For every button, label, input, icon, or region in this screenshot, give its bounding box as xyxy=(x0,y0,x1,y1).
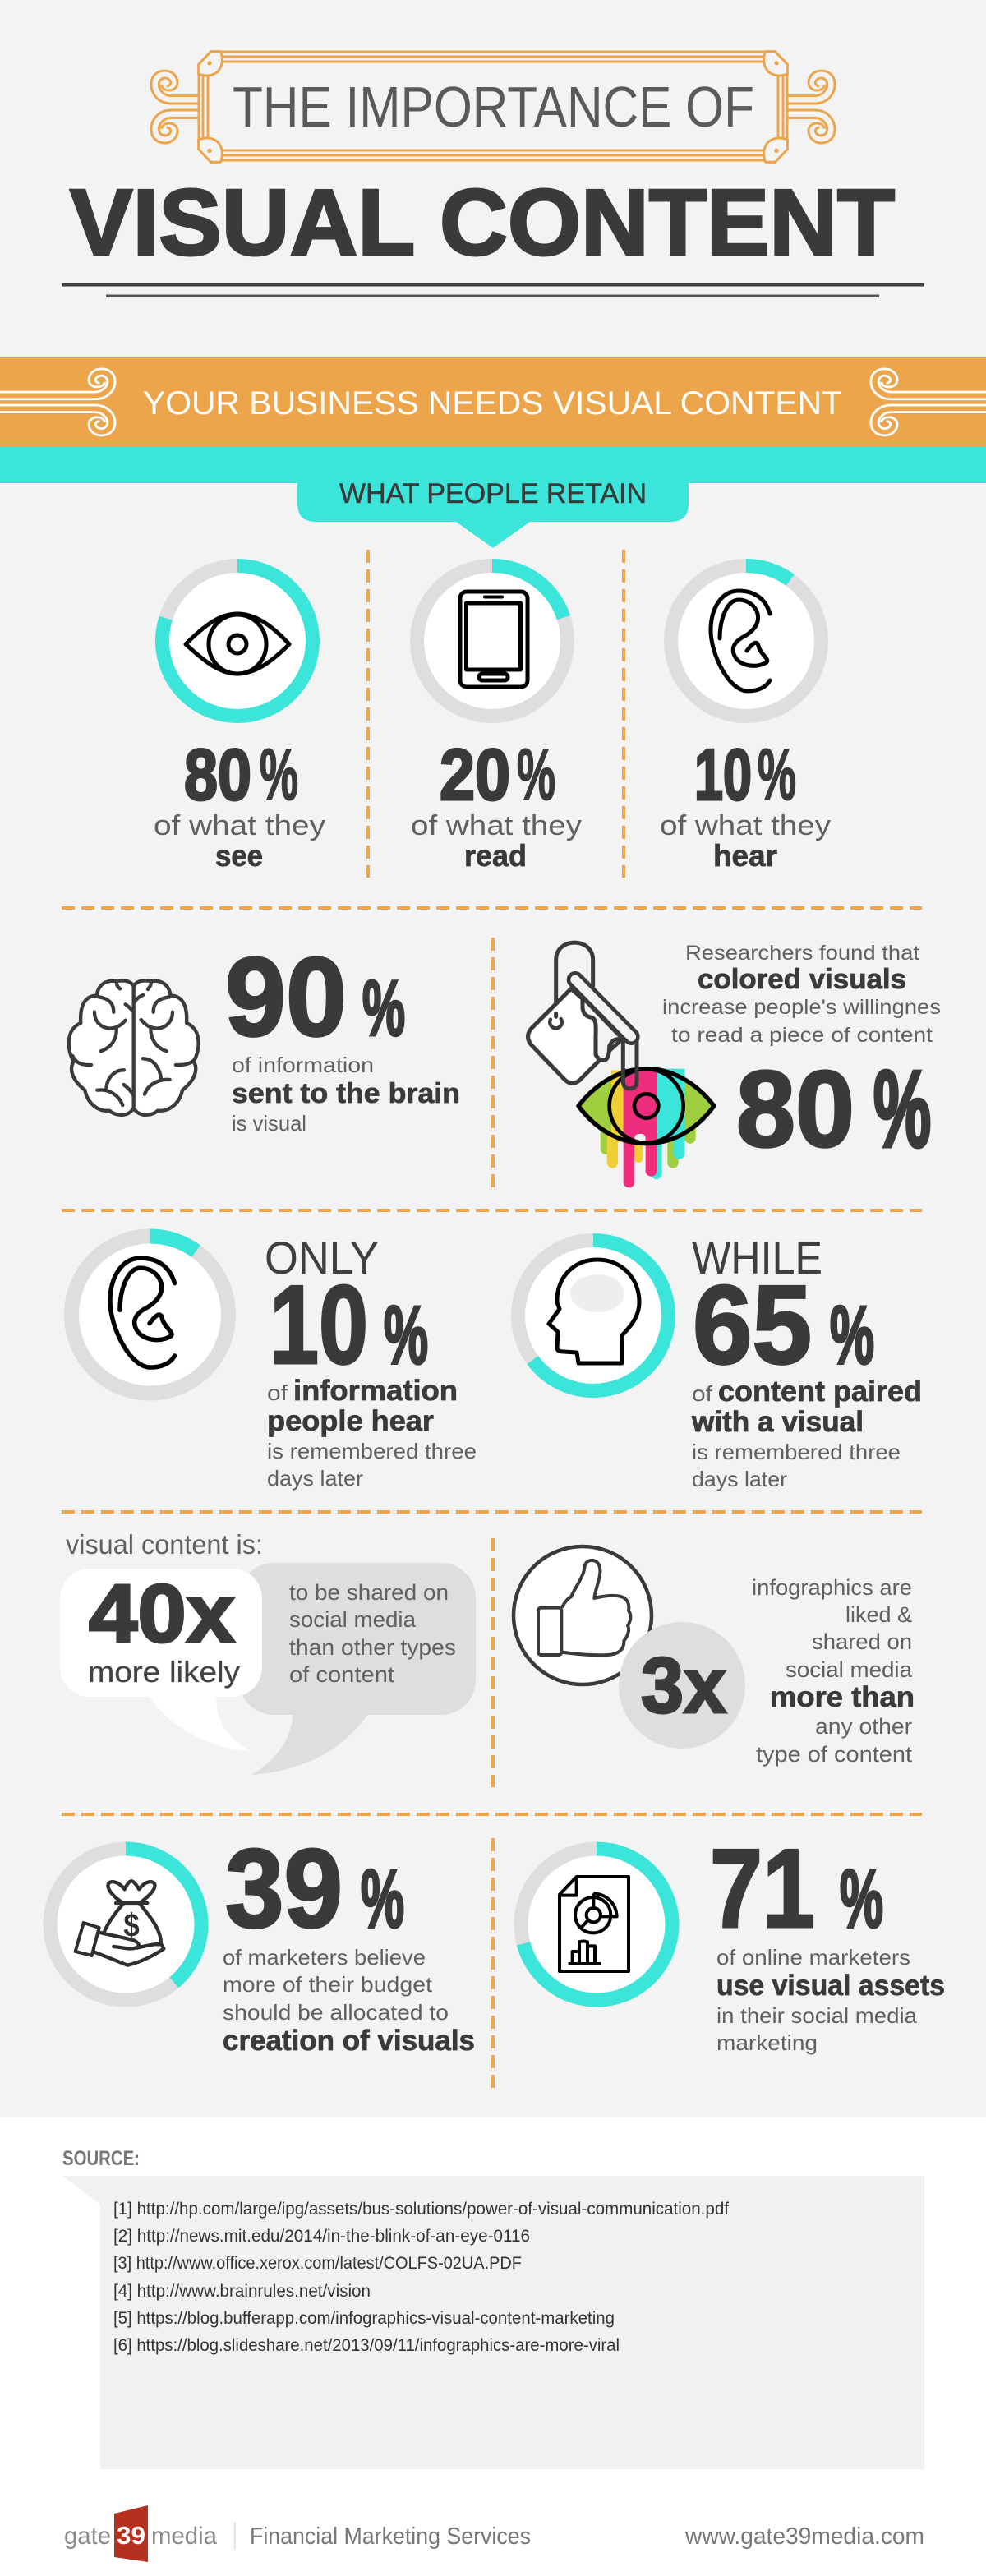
caption xyxy=(662,942,941,1047)
caption: should be allocated to xyxy=(223,2000,449,2025)
ring chart 39% xyxy=(50,1849,201,2000)
bubble text: to be shared on xyxy=(289,1580,449,1605)
caption xyxy=(154,810,325,873)
sources heading: SOURCE: xyxy=(62,2147,140,2170)
panel: sources list: [3] http://www.office.xerox.com/latest/COLFS-02UA.PDF xyxy=(113,2254,522,2273)
caption: more of their budget xyxy=(223,1972,433,1997)
ring chart 10% xyxy=(670,565,822,717)
panel: 20% read xyxy=(411,565,582,873)
badge 3x: 3x xyxy=(641,1642,726,1730)
stat 90%: % xyxy=(362,965,405,1053)
icon: brain xyxy=(69,980,199,1115)
icon: paint bucket pouring into eye xyxy=(528,942,714,1187)
caption: of xyxy=(267,1380,288,1405)
bubble text: than other types xyxy=(289,1635,456,1660)
badge 3x xyxy=(619,1622,745,1749)
stat 40x: 40x xyxy=(89,1568,235,1660)
title ornament frame xyxy=(151,52,835,162)
stat 39%: 39 xyxy=(225,1826,343,1951)
caption xyxy=(267,1375,477,1491)
caption: people hear xyxy=(267,1405,434,1437)
ring chart 20% xyxy=(417,565,567,717)
heading ONLY: ONLY xyxy=(265,1232,379,1283)
caption xyxy=(411,810,582,873)
icon: phone xyxy=(460,592,528,687)
gray speech bubble xyxy=(239,1563,476,1775)
ring chart 65% xyxy=(518,1241,669,1390)
panel: 3x infographics xyxy=(514,1546,915,1767)
caption: type of content xyxy=(756,1742,913,1767)
stat 80%: 80 xyxy=(736,1048,855,1169)
caption: is remembered three xyxy=(692,1440,901,1464)
panel: sources list: [4] http://www.brainrules.net/vision xyxy=(113,2282,371,2301)
footer logo: media xyxy=(151,2523,217,2550)
stat 65%: 65 xyxy=(693,1262,812,1387)
icon: money bag in hand: $ xyxy=(123,1908,140,1944)
caption: of information xyxy=(232,1053,374,1077)
panel: sources list: [5] https://blog.bufferapp.com/infographics-visual-content-marketing xyxy=(113,2309,615,2328)
icon: report document xyxy=(560,1877,629,1971)
caption: liked & xyxy=(845,1602,912,1627)
panel: sources list: [2] http://news.mit.edu/2014/in-the-blink-of-an-eye-0116 xyxy=(113,2227,530,2246)
stat 10%: 10 xyxy=(694,734,752,815)
caption: more than xyxy=(770,1681,915,1713)
bubble text xyxy=(289,1580,456,1687)
caption: shared on xyxy=(812,1629,912,1654)
caption: read xyxy=(464,839,527,873)
title line 2: VISUAL CONTENT xyxy=(70,171,895,275)
stat 90%: 90 xyxy=(225,934,347,1059)
caption: of marketers believe xyxy=(223,1945,426,1970)
caption: see xyxy=(215,839,263,873)
caption: information xyxy=(293,1375,458,1407)
caption: sent to the brain xyxy=(232,1078,460,1109)
teal band with pointer tab xyxy=(0,446,986,548)
footer tagline: Financial Marketing Services xyxy=(250,2523,531,2550)
caption xyxy=(232,1053,460,1136)
banner scroll left xyxy=(0,369,115,435)
panel: 80% see xyxy=(154,565,325,873)
footer logo: 39 xyxy=(117,2521,145,2550)
icon: ear xyxy=(110,1258,174,1367)
icon: head xyxy=(549,1260,639,1363)
caption: is visual xyxy=(232,1111,306,1136)
ring chart 71% xyxy=(521,1849,672,2000)
caption xyxy=(752,1575,915,1767)
caption: in their social media xyxy=(716,2003,918,2028)
bubble text: social media xyxy=(289,1607,417,1632)
banner scroll right xyxy=(871,369,986,435)
stat 71%: % xyxy=(840,1853,883,1945)
stat 80%: 80 xyxy=(184,734,251,815)
panel: 10% hear xyxy=(660,565,831,873)
caption xyxy=(660,810,831,873)
icon: money bag in hand xyxy=(76,1881,164,1965)
caption: increase people's willingnes xyxy=(662,996,941,1019)
stat 39% xyxy=(225,1826,404,1951)
white speech bubble xyxy=(60,1568,262,1751)
caption: of online marketers xyxy=(716,1945,910,1970)
caption: of what they xyxy=(660,810,831,841)
caption xyxy=(716,1945,945,2055)
stat 65%: % xyxy=(830,1289,874,1381)
bubble text: of content xyxy=(289,1662,395,1687)
caption: of what they xyxy=(411,810,582,841)
panel: while 65% xyxy=(518,1232,922,1491)
stat 71%: 71 xyxy=(710,1826,815,1951)
caption: is remembered three xyxy=(267,1439,477,1463)
stat 80%: % xyxy=(260,734,298,815)
caption: colored visuals xyxy=(698,964,906,995)
caption: of what they xyxy=(154,810,325,841)
panel: 80% colored visuals xyxy=(528,942,941,1187)
stat 39%: % xyxy=(361,1853,404,1945)
caption: any other xyxy=(815,1714,912,1739)
column dividers: retain row xyxy=(368,550,624,878)
ring chart 10% xyxy=(71,1236,228,1394)
panel: 40x more likely xyxy=(60,1529,476,1775)
stat 10%: % xyxy=(758,734,796,815)
caption xyxy=(223,1945,475,2057)
panel: 39% marketers xyxy=(50,1826,475,2057)
stat 20%: % xyxy=(517,734,555,815)
stat 10%: % xyxy=(384,1289,428,1381)
title underlines xyxy=(62,283,924,297)
caption: with a visual xyxy=(691,1406,864,1438)
stat 80%: % xyxy=(873,1048,931,1169)
heading WHILE: WHILE xyxy=(692,1232,822,1283)
panel: sources list xyxy=(62,2176,924,2469)
caption: marketing xyxy=(716,2030,818,2055)
caption: social media xyxy=(786,1657,913,1682)
caption xyxy=(691,1376,922,1491)
panel: only 10% xyxy=(71,1232,477,1491)
stat 20%: 20 xyxy=(440,734,510,815)
stat 90% xyxy=(225,934,405,1059)
panel: sources list: [6] https://blog.slideshare.net/2013/09/11/infographics-are-more-viral xyxy=(113,2336,620,2355)
paint drips xyxy=(601,1120,696,1187)
caption: infographics are xyxy=(752,1575,912,1600)
caption: use visual assets xyxy=(716,1970,945,2002)
caption: to read a piece of content xyxy=(671,1024,933,1047)
caption: Researchers found that xyxy=(685,942,919,965)
bubble label: more likely xyxy=(88,1655,240,1689)
panel: sources list: [1] http://hp.com/large/ipg/assets/bus-solutions/power-of-visual-communication.pdf xyxy=(113,2200,729,2219)
footer logo xyxy=(64,2505,217,2562)
caption: of xyxy=(692,1381,713,1406)
caption: content paired xyxy=(718,1376,922,1408)
intro text: visual content is: xyxy=(66,1529,263,1560)
caption: creation of visuals xyxy=(223,2025,475,2057)
panel: 71% marketers xyxy=(521,1826,945,2055)
caption: hear xyxy=(713,839,777,873)
banner heading: YOUR BUSINESS NEEDS VISUAL CONTENT xyxy=(143,385,842,422)
caption: days later xyxy=(267,1466,363,1491)
stat 20% xyxy=(440,734,555,815)
footer website: www.gate39media.com xyxy=(684,2523,924,2550)
icon: thumbs up xyxy=(514,1546,652,1684)
ring chart 80% xyxy=(163,565,312,717)
stat 80% xyxy=(736,1048,931,1169)
title line 1: THE IMPORTANCE OF xyxy=(233,75,754,139)
orange banner xyxy=(0,357,986,446)
stat 10%: 10 xyxy=(270,1262,368,1387)
footer logo: gate xyxy=(64,2523,111,2550)
icon: ear xyxy=(711,591,770,691)
icon: eye xyxy=(186,614,289,674)
panel: 90% brain xyxy=(69,934,460,1136)
stat 65% xyxy=(693,1262,874,1387)
tab heading: WHAT PEOPLE RETAIN xyxy=(339,478,647,509)
caption: days later xyxy=(692,1467,787,1491)
